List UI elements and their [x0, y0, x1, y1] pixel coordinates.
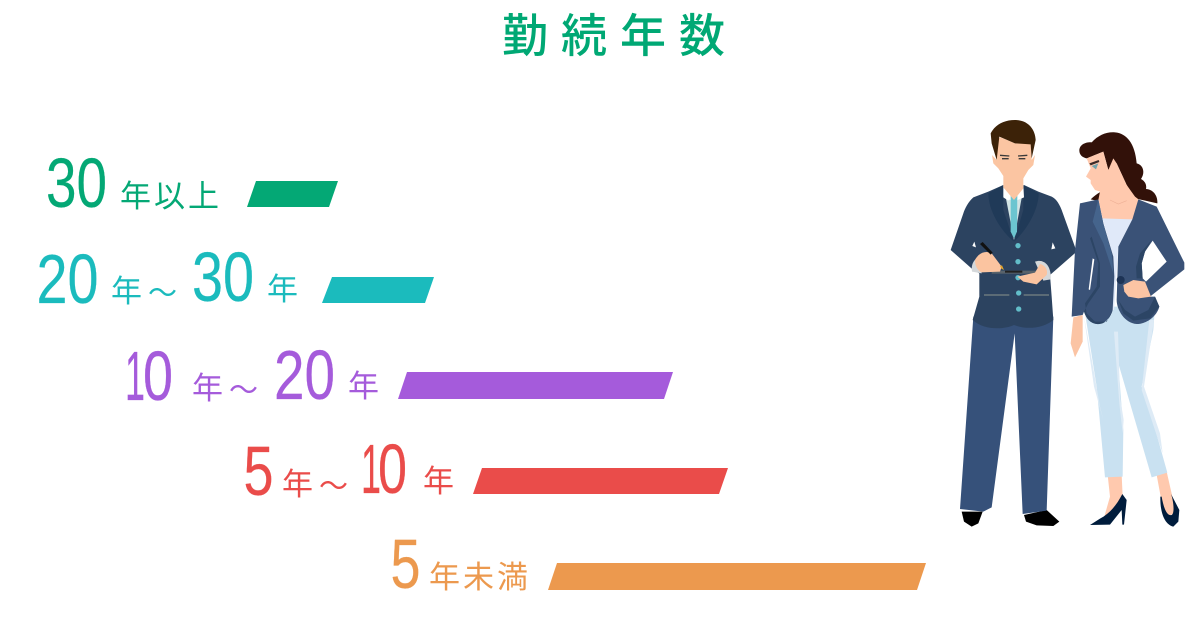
row: 5 to 10 years: 0: [378, 430, 407, 508]
bar: 10 to 20 years: [398, 372, 673, 399]
bar: under 5 years: [548, 563, 926, 590]
row: under 5 years: 年未満: [429, 560, 531, 595]
row: under 5 years: [390, 525, 926, 603]
woman hand on hip: [1123, 280, 1151, 298]
row: 10 to 20 years: 1: [125, 337, 145, 415]
row: 10 to 20 years: [125, 336, 673, 415]
row: 5 to 10 years: 年: [282, 467, 313, 502]
row: 10 to 20 years: 20: [274, 336, 335, 414]
row: 20 to 30 years: ～: [148, 278, 177, 310]
woman upper body: [1071, 132, 1184, 357]
illustration: business man and woman: [951, 120, 1184, 527]
row: 5 to 10 years: [244, 430, 728, 510]
bar: 5 to 10 years: [473, 468, 728, 494]
row: 5 to 10 years: ～: [319, 471, 348, 503]
title: 勤続年数: [502, 10, 738, 62]
row: 30 years or more: 年以上: [120, 179, 222, 214]
row: 5 to 10 years: 1: [361, 430, 381, 508]
man: [951, 120, 1077, 527]
jacket: [1072, 199, 1114, 324]
row: 10 to 20 years: 年: [192, 371, 223, 406]
row: 5 to 10 years: 5: [244, 432, 274, 510]
bar: 20 to 30 years: [322, 277, 434, 303]
row: 20 to 30 years: 30: [192, 238, 254, 316]
row: 30 years or more: 30: [46, 144, 107, 222]
row: 10 to 20 years: ～: [229, 375, 258, 407]
row: 5 to 10 years: 年: [423, 464, 454, 499]
row: 20 to 30 years: 20: [36, 240, 98, 318]
woman hair: [1079, 132, 1157, 203]
row: under 5 years: 5: [390, 525, 420, 603]
bar: 30 years or more: [247, 181, 338, 207]
row: 10 to 20 years: 年: [348, 369, 379, 404]
row: 20 to 30 years: [36, 238, 434, 318]
row: 20 to 30 years: 年: [267, 272, 298, 307]
row: 10 to 20 years: 0: [143, 337, 173, 415]
row: 20 to 30 years: 年: [111, 274, 142, 309]
row: 30 years or more: [46, 144, 338, 222]
woman legs: [1084, 307, 1179, 527]
